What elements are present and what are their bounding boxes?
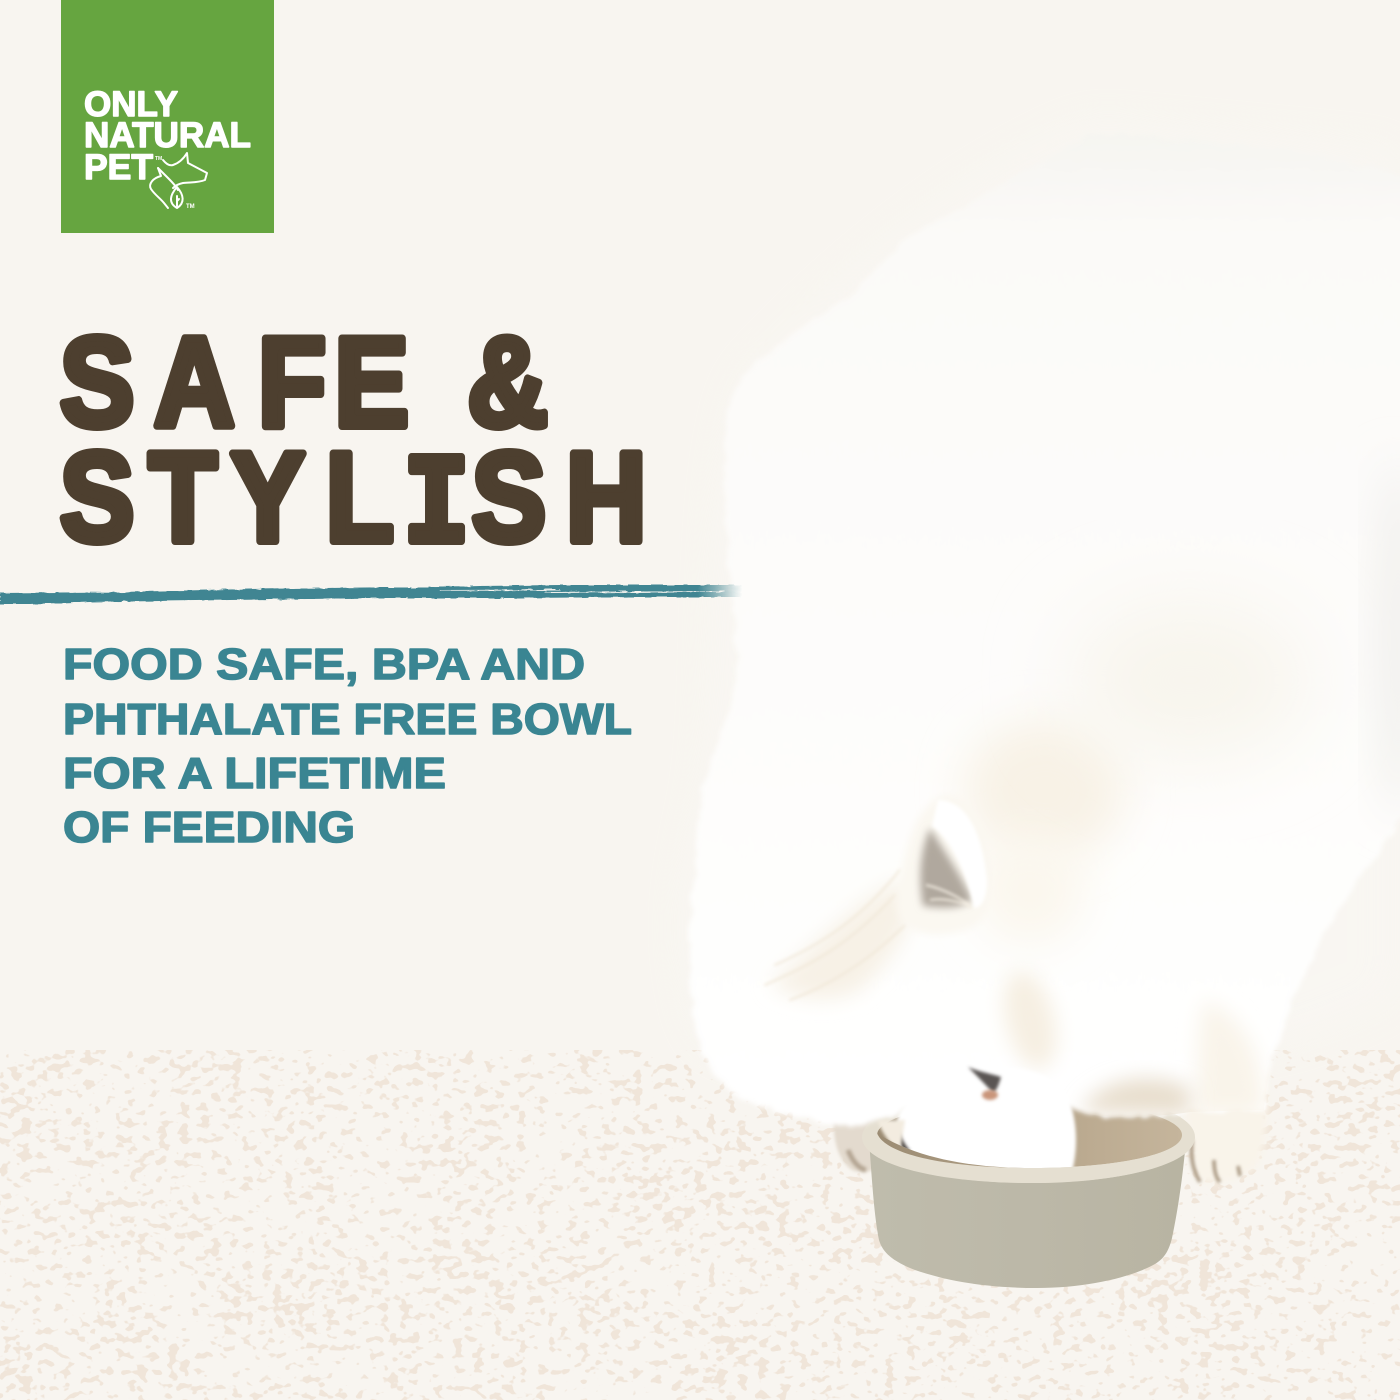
logo trademark [155, 156, 195, 210]
logo trademark: TM [155, 156, 162, 162]
logo wordmark: ONLY [84, 85, 178, 124]
subheading: OF FEEDING [63, 803, 355, 852]
dog eye [968, 1067, 1001, 1100]
speckled floor [0, 1050, 1400, 1400]
subheading: FOR A LIFETIME [63, 749, 446, 798]
dog body [690, 133, 1400, 1126]
subheading: FOOD SAFE, BPA AND [63, 640, 585, 689]
dog ear [897, 795, 992, 935]
dog paws [834, 1070, 1267, 1183]
logo wordmark: NATURAL [84, 116, 251, 155]
ear hair strands [765, 870, 905, 1000]
logo wordmark [84, 85, 251, 187]
logo panel [61, 0, 274, 233]
subheading: PHTHALATE FREE BOWL [63, 695, 632, 744]
brush divider [0, 585, 742, 604]
photo: white dog eating from bowl [689, 282, 1400, 1288]
heading [60, 312, 647, 579]
dog muzzle [879, 1096, 1078, 1168]
heading: STYLISH [60, 427, 647, 579]
logo trademark: TM [186, 204, 195, 210]
soft halo around dog [681, 120, 1400, 1078]
subheading [63, 640, 632, 852]
logo wordmark: PET [84, 148, 153, 187]
fur shading [770, 460, 1400, 1115]
icon: dog and cat with leaf [150, 153, 207, 208]
bowl rim front [862, 1133, 1195, 1183]
heading: SAFE & [60, 312, 548, 454]
bowl [862, 1090, 1195, 1288]
